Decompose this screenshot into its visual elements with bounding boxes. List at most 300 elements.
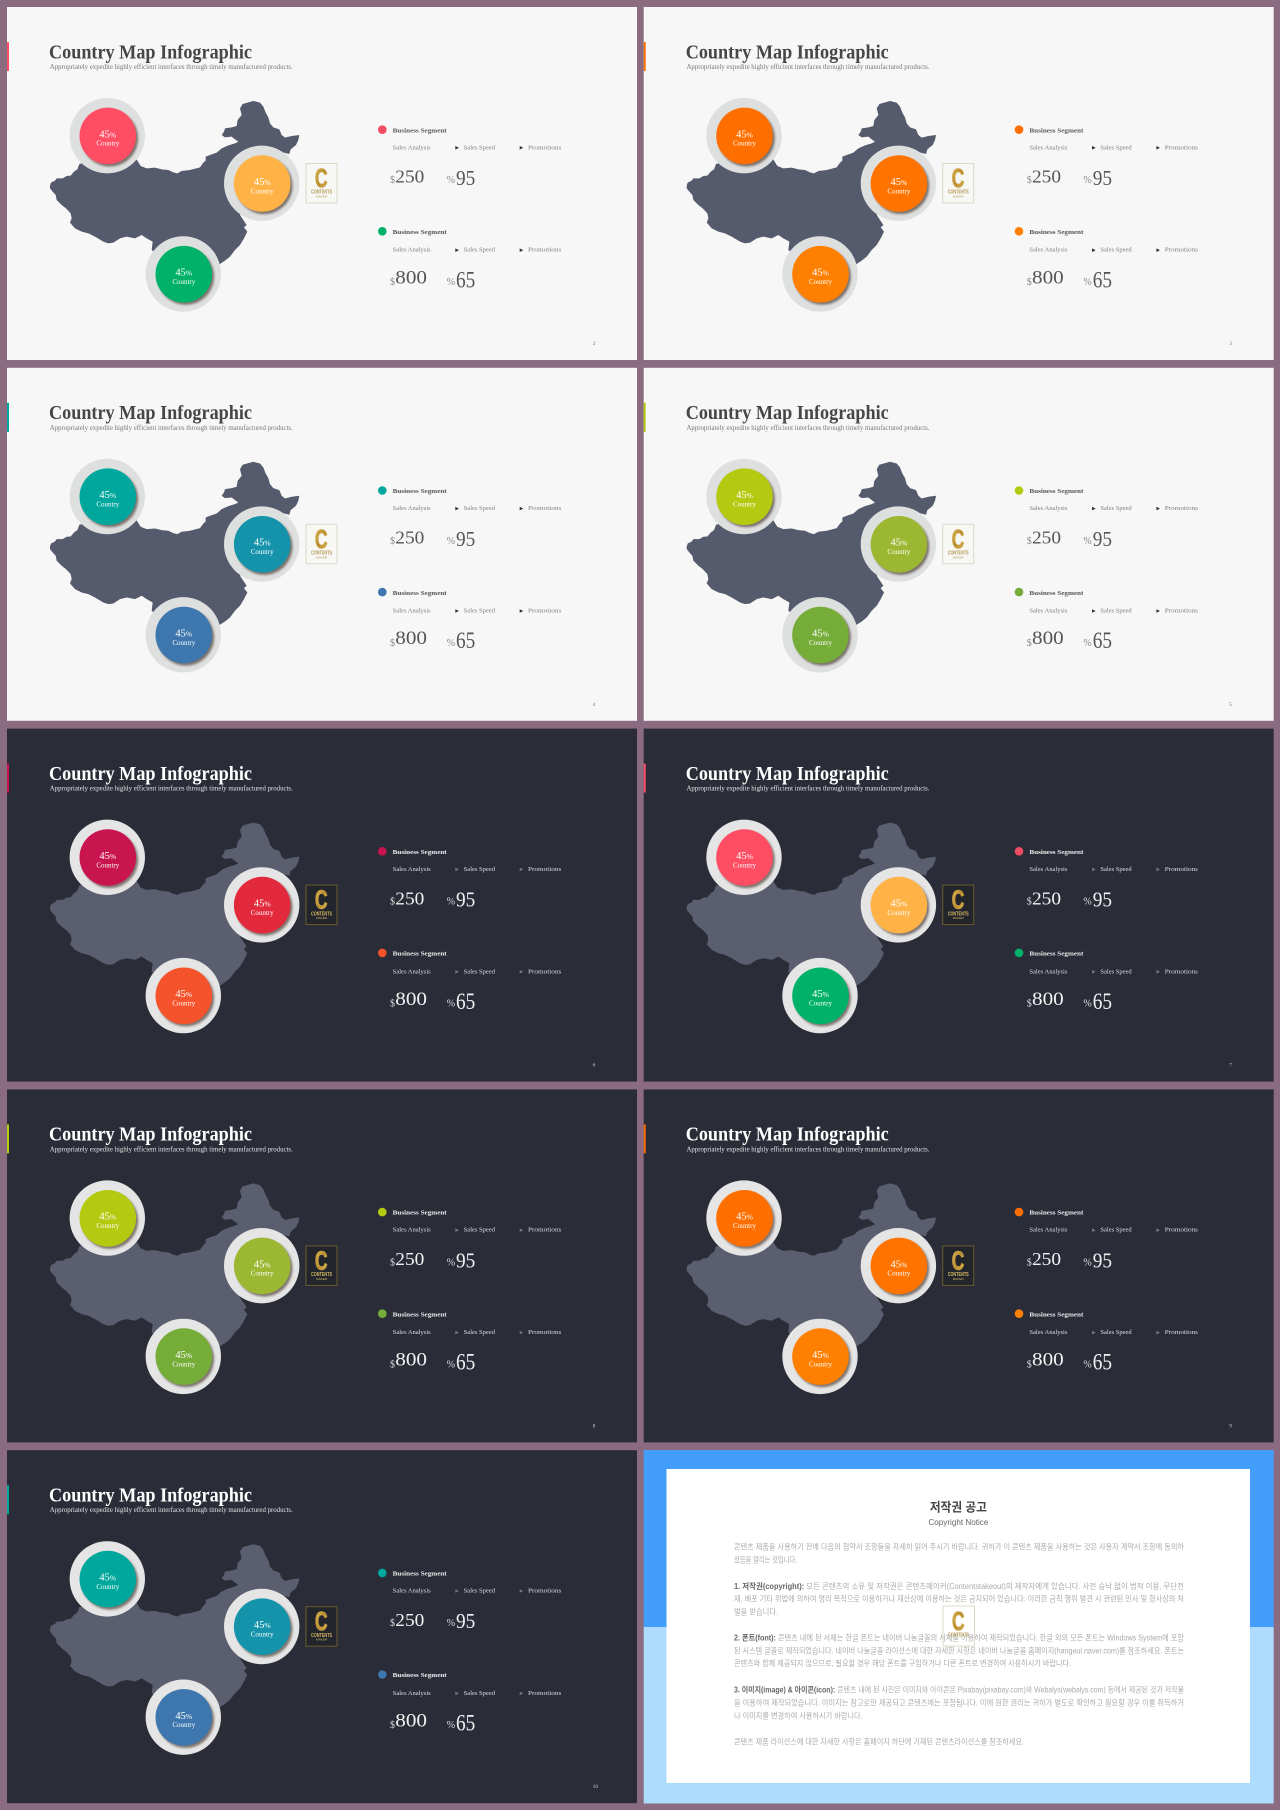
segment 1: 95 (1093, 166, 1112, 190)
circle: bottom (146, 236, 221, 312)
circle: right (224, 506, 299, 582)
segment 2: 65 (1093, 1350, 1112, 1375)
heading: Country Map Infographic (49, 1484, 252, 1506)
notice intro: 콘텐츠 제품을 사용하기 전에 다음의 협약서 조항들을 자세히 읽어 주시기 바랍니다. 귀하가 이 콘텐츠 제품을 사용하는 것은 사용자 계약서 조항에 동의하 (734, 1541, 1185, 1551)
accent tick (7, 42, 9, 71)
segment 2: 800 (395, 989, 427, 1010)
segment 2: 800 (395, 1350, 427, 1371)
logo: MAKER (316, 1638, 327, 1642)
segment 1: 250 (1032, 167, 1061, 187)
segment 1: 250 (1032, 527, 1061, 547)
segment 1: 95 (456, 1609, 475, 1633)
segment 2: 65 (1093, 989, 1112, 1014)
circle: right (861, 867, 936, 943)
circle: right: Country (251, 1630, 274, 1638)
segment 2: % (447, 277, 455, 288)
circle: bottom: Country (809, 1360, 832, 1368)
segment 1: Sales Analysis (393, 144, 431, 151)
segment 2: % (447, 1720, 455, 1731)
circle: bottom (146, 1319, 221, 1394)
segment 1: Business Segment (393, 1570, 448, 1577)
segment 1: Sales Analysis (1029, 1227, 1068, 1234)
segment 2: Promotions (528, 1690, 562, 1697)
notice clause 2: 된 시스템 글꼴로 제작되었습니다. 네이버 나눔글꼴 라이선스에 대한 자세한 사항은 네이버 나눔글꼴 홈페이지(hangeul.naver.com)를 참조하세요. 폰트는 (734, 1645, 1184, 1655)
circle: top left (706, 820, 782, 895)
logo: C (952, 1245, 964, 1275)
segment 1: Promotions (1165, 505, 1199, 512)
logo: MAKER (316, 194, 327, 198)
map: china (50, 1544, 299, 1713)
segment 2: 800 (1032, 1350, 1064, 1371)
circle: right: 45% (891, 898, 907, 909)
subtitle: Appropriately expedite highly efficient interfaces through timely manufactured products. (687, 423, 930, 432)
segment 2: Promotions (528, 247, 562, 254)
segment 2: $ (1027, 999, 1032, 1010)
page number: 8 (593, 1423, 596, 1429)
circle: bottom: Country (172, 639, 196, 647)
panel: slide 7 dark (644, 729, 1274, 1082)
map: china (50, 823, 299, 992)
segment 1: 95 (456, 166, 475, 190)
panel: slide 3 light (644, 7, 1274, 360)
segment 2: % (447, 999, 455, 1010)
notice footer line: 콘텐츠 제품 라이선스에 대한 자세한 사항은 홈페이지 하단에 기재된 콘텐츠라이선스를 참조하세요. (734, 1736, 1024, 1746)
circle: top left (706, 459, 782, 534)
accent tick (7, 764, 9, 793)
circle: right: 45% (254, 898, 271, 909)
segment 1: 250 (395, 527, 424, 547)
panel: slide 8 dark (7, 1089, 637, 1442)
circle: bottom: 45% (812, 268, 829, 279)
segment 1: $ (1027, 175, 1032, 186)
segment 2: Sales Speed (1100, 1329, 1133, 1336)
segment 2: Sales Analysis (1029, 968, 1068, 975)
subtitle: Appropriately expedite highly efficient interfaces through timely manufactured products. (50, 1505, 293, 1514)
notice intro: 셨음을 알리는 것입니다. (734, 1555, 797, 1565)
circle: top left (70, 1541, 145, 1617)
segment 2: $ (390, 1720, 395, 1731)
segment 1: Promotions (1165, 1227, 1199, 1234)
segment 1 (378, 847, 562, 912)
subtitle: Appropriately expedite highly efficient interfaces through timely manufactured products. (50, 1144, 293, 1153)
segment 2: $ (390, 277, 395, 288)
segment 1: 95 (456, 1248, 475, 1272)
logo (306, 1245, 337, 1285)
segment 1: Sales Analysis (393, 1227, 431, 1234)
segment 1: 250 (1032, 1249, 1061, 1269)
panel: copyright notice (644, 1450, 1274, 1804)
logo watermark: CONTENTS (948, 1633, 970, 1639)
segment 2 (1015, 949, 1199, 1014)
segment 2: $ (390, 1359, 395, 1370)
logo: C (952, 163, 964, 193)
circle: bottom: Country (809, 639, 832, 647)
subtitle: Appropriately expedite highly efficient interfaces through timely manufactured products. (50, 423, 293, 432)
segment 2: Sales Speed (464, 1329, 496, 1336)
logo: CONTENTS (948, 1272, 969, 1278)
logo: CONTENTS (311, 1633, 333, 1639)
logo: CONTENTS (948, 550, 969, 556)
segment 1: $ (390, 175, 395, 186)
segment 1: % (447, 1618, 455, 1629)
heading: Country Map Infographic (686, 1124, 889, 1146)
notice subheading: Copyright Notice (928, 1517, 989, 1527)
accent tick (644, 1124, 646, 1153)
circle: right: 45% (254, 538, 271, 549)
segment 2: Sales Speed (1100, 247, 1133, 254)
subtitle: Appropriately expedite highly efficient interfaces through timely manufactured products. (687, 1144, 930, 1153)
circle: right: Country (251, 909, 274, 917)
circle: right: Country (887, 548, 911, 556)
notice clause 1: 재, 배포 기타 위법에 의하여 영리 목적으로 이용하거나 재산상에 이용하는 것은 금지되어 있습니다. 이러한 금칙 행위 발견 시 관련된 민사 및 형사상의 처 (734, 1594, 1184, 1604)
circle: bottom: Country (809, 278, 832, 286)
circle: top left: 45% (736, 129, 753, 140)
segment 2: Business Segment (1029, 1311, 1084, 1318)
segment 1: % (447, 175, 455, 186)
circle: bottom (782, 236, 858, 312)
segment 1: $ (1027, 536, 1032, 547)
subtitle: Appropriately expedite highly efficient interfaces through timely manufactured products. (50, 784, 293, 793)
segment 2: Business Segment (1029, 951, 1084, 958)
segment 2: % (447, 1359, 455, 1370)
segment 1: Sales Speed (1100, 505, 1133, 512)
segment 1: $ (390, 1618, 395, 1629)
circle: right: 45% (891, 1259, 907, 1270)
segment 2: 800 (395, 628, 427, 649)
segment 2: 65 (456, 1710, 475, 1735)
segment 2 (378, 1309, 562, 1375)
segment 1: $ (390, 897, 395, 908)
accent tick (7, 403, 9, 432)
circle: top left: Country (733, 500, 756, 508)
segment 1: Sales Speed (464, 1587, 496, 1594)
segment 2 (378, 588, 562, 653)
segment 2: 65 (1093, 628, 1112, 653)
logo: MAKER (953, 194, 964, 198)
segment 2: Sales Speed (464, 247, 496, 254)
page number: 7 (1229, 1063, 1232, 1069)
segment 1: Promotions (1165, 866, 1199, 873)
circle: right (861, 506, 936, 582)
segment 2: Promotions (1165, 607, 1199, 614)
segment 1: Business Segment (393, 1210, 448, 1217)
notice heading: 저작권 공고 (930, 1500, 987, 1515)
segment 1 (1015, 1208, 1199, 1272)
segment 2: 800 (1032, 267, 1064, 288)
circle: bottom (782, 958, 858, 1033)
segment 1: $ (390, 1257, 395, 1268)
circle: top left (706, 98, 782, 173)
segment 2: Sales Analysis (1029, 247, 1068, 254)
logo: MAKER (316, 555, 327, 559)
map: china (687, 823, 936, 992)
segment 1: Sales Speed (464, 505, 496, 512)
segment 1: % (447, 536, 455, 547)
circle: top left: Country (733, 1222, 756, 1230)
segment 1: Promotions (1165, 144, 1199, 151)
circle: bottom (146, 958, 221, 1033)
segment 1 (1015, 486, 1199, 551)
segment 1: 95 (456, 888, 475, 912)
segment 2: 65 (456, 989, 475, 1014)
notice clause 2: 콘텐츠와 함께 제공되지 않으므로, 필요할 경우 해당 폰트를 구입하거나 다른 폰트로 변경하여 사용하시기 바랍니다. (734, 1658, 1071, 1668)
circle: bottom: Country (172, 1000, 196, 1008)
circle: top left: 45% (99, 1212, 116, 1223)
segment 2: Promotions (528, 607, 562, 614)
segment 1: Sales Speed (1100, 1227, 1133, 1234)
segment 1: Promotions (528, 1227, 562, 1234)
subtitle: Appropriately expedite highly efficient interfaces through timely manufactured products. (687, 784, 930, 793)
notice clause 3: 3. 이미지(image) & 아이콘(icon): 콘텐츠 내에 된 사진은 이미지와 아이콘은 Pixabay(pixabay.com)와 Webalys(webalys.com) 등에서 제공된 것과 저작물 (734, 1685, 1184, 1695)
segment 1: Sales Analysis (1029, 144, 1068, 151)
logo watermark: C (952, 1606, 965, 1636)
circle: top left: Country (733, 140, 756, 148)
segment 1 (378, 486, 562, 551)
segment 1: % (1083, 175, 1092, 186)
segment 2 (378, 1670, 562, 1736)
notice clause 3: 나 이미지를 변경하여 사용하시기 바랍니다. (734, 1710, 863, 1720)
segment 2: $ (1027, 638, 1032, 649)
segment 2: % (447, 638, 455, 649)
segment 2 (378, 227, 562, 292)
segment 1: $ (1027, 897, 1032, 908)
segment 1: Sales Analysis (393, 866, 431, 873)
segment 2: Business Segment (393, 951, 448, 958)
map: china (687, 1183, 936, 1352)
logo (306, 1606, 337, 1646)
subtitle: Appropriately expedite highly efficient interfaces through timely manufactured products. (50, 62, 293, 71)
segment 1 (1015, 125, 1199, 190)
circle: right: Country (251, 187, 274, 195)
circle: top left (70, 98, 145, 173)
heading: Country Map Infographic (49, 402, 252, 424)
segment 2: % (1083, 999, 1092, 1010)
map: china (687, 462, 936, 631)
segment 1: % (1083, 1257, 1092, 1268)
segment 2: 800 (395, 1710, 427, 1731)
circle: bottom (782, 597, 858, 672)
segment 2: Sales Analysis (393, 968, 431, 975)
segment 2: 800 (395, 267, 427, 288)
segment 1: Promotions (528, 866, 562, 873)
segment 1: Business Segment (393, 849, 448, 856)
segment 2: Sales Speed (1100, 607, 1133, 614)
logo: MAKER (953, 1277, 964, 1281)
segment 2: $ (1027, 1359, 1032, 1370)
segment 1 (378, 1569, 562, 1633)
circle: bottom: 45% (175, 1350, 192, 1361)
segment 1: Sales Speed (464, 1227, 496, 1234)
segment 2: Business Segment (1029, 590, 1084, 597)
segment 1 (378, 125, 562, 190)
segment 2: $ (390, 999, 395, 1010)
segment 1: Promotions (528, 505, 562, 512)
notice clause 2 (734, 1633, 1185, 1668)
segment 1: % (1083, 536, 1092, 547)
segment 2: Promotions (528, 1329, 562, 1336)
logo (943, 885, 974, 925)
logo: CONTENTS (311, 190, 333, 196)
notice clause 1 (734, 1581, 1184, 1616)
segment 1: Promotions (528, 144, 562, 151)
map: china (50, 101, 299, 270)
circle: top left: Country (96, 140, 120, 148)
accent tick (7, 1485, 9, 1514)
circle: right: Country (887, 1270, 911, 1278)
logo (306, 885, 337, 925)
segment 1: Business Segment (1029, 849, 1084, 856)
logo: CONTENTS (311, 550, 333, 556)
page number: 10 (593, 1784, 598, 1790)
page number: 6 (593, 1063, 596, 1069)
segment 2: 800 (1032, 628, 1064, 649)
circle: right (861, 1228, 936, 1303)
segment 2: Sales Speed (1100, 968, 1133, 975)
notice clause 1: 벌을 받습니다. (734, 1606, 778, 1616)
segment 1: 95 (1093, 888, 1112, 912)
circle: bottom: Country (172, 278, 196, 286)
circle: top left: 45% (736, 851, 753, 862)
segment 1: Sales Speed (464, 144, 496, 151)
logo (943, 1245, 974, 1285)
logo watermark (943, 1606, 974, 1646)
segment 2: Sales Analysis (1029, 607, 1068, 614)
segment 1: 250 (395, 1610, 424, 1630)
circle: bottom (146, 1680, 221, 1755)
notice intro (734, 1541, 1185, 1565)
logo (306, 524, 337, 564)
circle: right: 45% (254, 1620, 271, 1631)
panel: slide 6 dark (7, 729, 637, 1082)
accent tick (644, 403, 646, 432)
subtitle: Appropriately expedite highly efficient interfaces through timely manufactured products. (687, 62, 930, 71)
circle: bottom: 45% (175, 1711, 192, 1722)
circle: top left: 45% (99, 851, 116, 862)
panel: slide 9 dark (644, 1089, 1274, 1442)
logo: MAKER (316, 916, 327, 920)
logo: CONTENTS (311, 911, 333, 917)
segment 2: Business Segment (393, 1672, 448, 1679)
segment 2 (378, 949, 562, 1014)
segment 2: Sales Analysis (1029, 1329, 1068, 1336)
heading: Country Map Infographic (49, 1124, 252, 1146)
circle: right: Country (251, 548, 274, 556)
segment 2: Business Segment (393, 229, 448, 236)
accent tick (644, 42, 646, 71)
segment 1: % (447, 897, 455, 908)
circle: bottom (146, 597, 221, 672)
circle: top left: 45% (99, 1572, 116, 1583)
segment 1: Business Segment (1029, 1210, 1084, 1217)
segment 2: % (1083, 638, 1092, 649)
circle: bottom: 45% (812, 1350, 829, 1361)
circle: right (224, 146, 299, 221)
circle: top left (70, 1180, 145, 1256)
segment 1: $ (1027, 1257, 1032, 1268)
segment 1: % (447, 1257, 455, 1268)
segment 2: Sales Analysis (393, 1329, 431, 1336)
segment 1 (1015, 847, 1199, 912)
logo: MAKER (316, 1277, 327, 1281)
segment 2: % (1083, 1359, 1092, 1370)
segment 1: Sales Analysis (393, 505, 431, 512)
notice clause 3 (734, 1685, 1184, 1720)
notice clause 2: 2. 폰트(font): 콘텐츠 내에 된 서체는 한글 폰트는 네이버 나눔글꼴의 서체를 이용하여 제작되었습니다. 한글 외의 모든 폰트는 Windows System에 포함 (734, 1633, 1185, 1643)
circle: top left (70, 459, 145, 534)
circle: right: Country (887, 909, 911, 917)
segment 2: Sales Analysis (393, 247, 431, 254)
segment 2: Promotions (1165, 1329, 1199, 1336)
page number: 3 (1229, 341, 1232, 347)
page number: 4 (593, 702, 596, 708)
segment 1 (378, 1208, 562, 1272)
logo: CONTENTS (311, 1272, 333, 1278)
segment 2: Sales Speed (464, 607, 496, 614)
page number: 5 (1229, 702, 1232, 708)
segment 1: 95 (1093, 1248, 1112, 1272)
accent tick (644, 764, 646, 793)
circle: right (224, 1589, 299, 1664)
logo: MAKER (953, 916, 964, 920)
segment 2: Promotions (1165, 247, 1199, 254)
circle: top left: 45% (736, 490, 753, 501)
segment 2: Sales Speed (464, 1690, 496, 1697)
notice clause 1: 1. 저작권(copyright): 모든 콘텐츠의 소유 및 저작권은 콘텐츠메이커(Contentstakeout)의 제작자에게 있습니다. 사전 승낙 없이 법적 이용, 무단전 (734, 1581, 1184, 1591)
segment 2: Sales Speed (464, 968, 496, 975)
logo: C (315, 163, 328, 193)
circle: bottom: Country (809, 1000, 832, 1008)
circle: bottom (782, 1319, 858, 1394)
circle: right: 45% (891, 538, 907, 549)
segment 1: Sales Speed (1100, 866, 1133, 873)
circle: top left (706, 1180, 782, 1256)
segment 1: Sales Analysis (393, 1587, 431, 1594)
circle: bottom: 45% (175, 268, 192, 279)
circle: right: Country (251, 1270, 274, 1278)
segment 2: Promotions (528, 968, 562, 975)
logo: C (952, 524, 964, 554)
segment 1: 250 (1032, 888, 1061, 908)
heading: Country Map Infographic (49, 41, 252, 63)
segment 1: Business Segment (1029, 127, 1084, 134)
map: china (50, 462, 299, 631)
segment 1: Sales Analysis (1029, 505, 1068, 512)
circle: top left: Country (96, 1583, 120, 1591)
circle: top left: Country (96, 1222, 120, 1230)
segment 2: 65 (456, 1350, 475, 1375)
heading: Country Map Infographic (686, 763, 889, 785)
notice clause 3: 을 이용하여 제작되었습니다. 이미지는 참고로만 제공되고 콘텐츠에는 포함됩니다. 이에 원한 권리는 귀하가 별도로 확인하고 필요할 경우 이를 취득하거 (734, 1698, 1184, 1708)
logo: C (315, 524, 328, 554)
page number: 9 (1229, 1423, 1232, 1429)
segment 2: 65 (1093, 267, 1112, 292)
panel: slide 4 light (7, 368, 637, 721)
segment 1: Business Segment (393, 488, 448, 495)
segment 1: 250 (395, 1249, 424, 1269)
segment 1: $ (390, 536, 395, 547)
circle: bottom: 45% (175, 628, 192, 639)
segment 2: 65 (456, 267, 475, 292)
logo: CONTENTS (948, 911, 969, 917)
circle: top left: 45% (99, 129, 116, 140)
panel: slide 5 light (644, 368, 1274, 721)
logo: MAKER (953, 555, 964, 559)
circle: right: 45% (891, 177, 907, 188)
segment 2: Business Segment (1029, 229, 1084, 236)
circle: right: Country (887, 187, 911, 195)
circle: top left (70, 820, 145, 895)
circle: bottom: Country (172, 1360, 196, 1368)
